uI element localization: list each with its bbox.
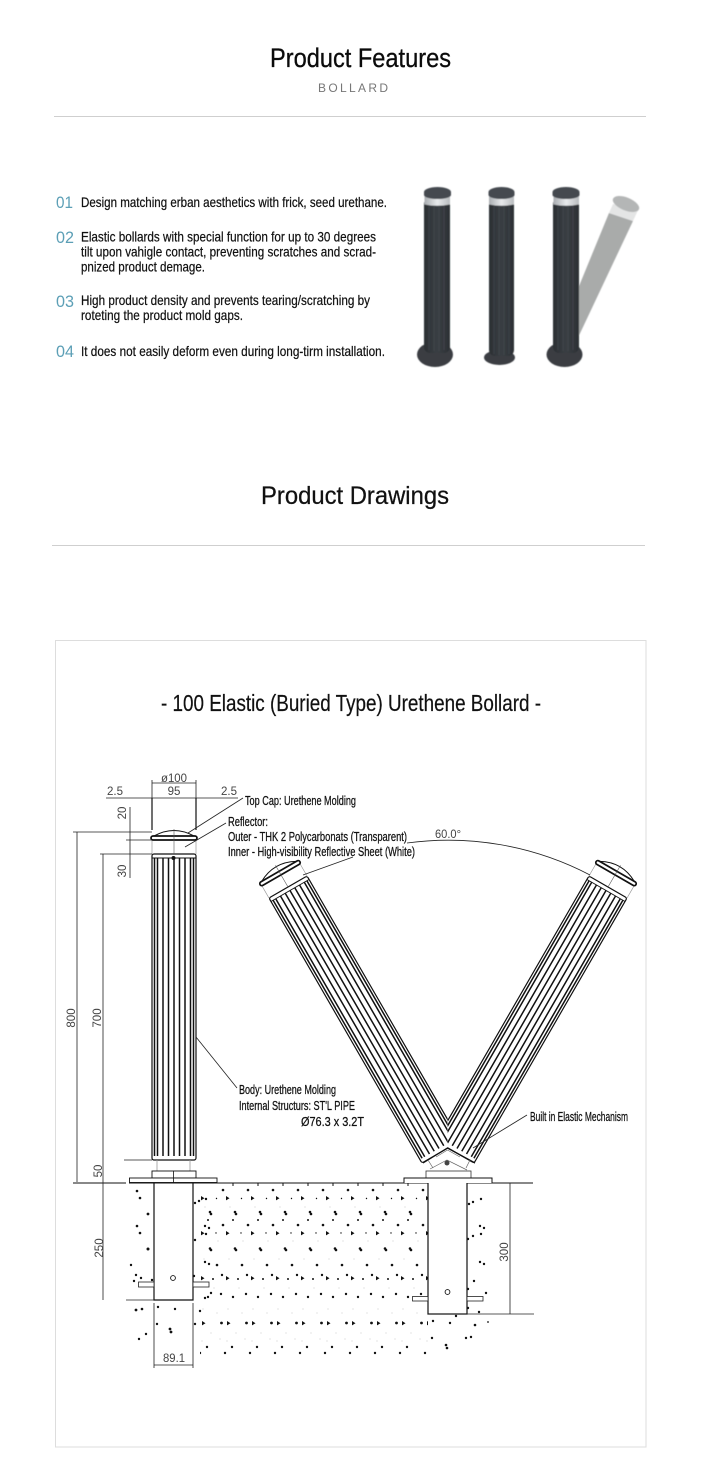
dimension values: 2.5 [107,786,123,798]
dimension lines [66,773,534,1365]
title: Product Features: Product Features [270,43,451,73]
dimension values: 2.5 [221,786,237,798]
feature 01: Design matching erban aesthetics with frick, seed urethane. [81,194,387,210]
bollard 3 with tilted ghost [546,187,641,367]
feature 03: High product density and prevents tearing/scratching by [81,292,370,308]
feature 01: 01 [56,194,73,212]
dimension values: 30 [117,865,129,877]
feature 02: pnized product demage. [81,258,205,274]
feature 03 [56,292,370,323]
heading: Product Drawings: Product Drawings [261,482,449,510]
callout: body [196,1037,364,1129]
callout: top cap [188,794,356,833]
callout: body: Body: Urethene Molding [239,1083,336,1097]
left bollard elevation [130,829,217,1183]
dimension values: 250 [94,1238,106,1258]
feature 04: It does not easily deform even during long-tirm installation. [81,343,385,359]
dimension values: 20 [117,807,129,819]
feature 02: Elastic bollards with special function for up to 30 degrees [81,228,376,244]
dimension values: 50 [93,1165,105,1177]
feature 02 [56,228,376,274]
subtitle: bollard: BOLLARD [318,81,388,95]
dimension values [66,773,511,1365]
callout: elastic mechanism: Built in Elastic Mechanism [530,1110,628,1124]
feature 02: tilt upon vahigle contact, preventing scratches and scrad- [81,244,376,260]
product photo: bollards [417,187,641,367]
feature 03: 03 [56,293,74,311]
callout: reflector: Outer - THK 2 Polycarbonats (Transparent) [228,830,407,844]
dimension values: 700 [92,1008,104,1028]
callout: body: Ø76.3 x 3.2T [301,1115,364,1129]
dimension values: 800 [66,1008,78,1028]
callout: body: Internal Structurs: ST'L PIPE [239,1099,355,1113]
right buried sleeve [412,1183,483,1314]
dimension values: ø100 [161,773,187,785]
feature 03: roteting the product mold gaps. [81,307,243,323]
ground line [73,1182,533,1184]
60 degree arc [303,840,590,875]
bollard 2 [484,187,515,365]
bollard 1 [417,187,453,367]
right tilted bollard [435,854,640,1164]
tilted bollards V [256,854,640,1314]
elastic mechanism and base [404,1148,492,1183]
left buried sleeve [138,1183,209,1368]
drawing title: - 100 Elastic (Buried Type) Urethene Bollard - [161,690,541,716]
callout: elastic mechanism [473,1110,628,1148]
feature 04: 04 [56,343,74,361]
gravel ground fill [130,1183,489,1358]
dimension values: 89.1 [163,1353,185,1365]
dimension values: 60.0° [435,829,461,841]
callout: top cap: Top Cap: Urethene Molding [245,794,356,808]
left tilted bollard [256,854,461,1164]
dimension values: 95 [168,786,180,798]
callout: reflector: Reflector: [228,815,268,829]
feature 02: 02 [56,229,74,247]
dimension values: 300 [499,1242,511,1262]
feature list [56,194,387,361]
panel: technical drawing [56,640,646,1447]
callout: reflector [185,815,415,859]
callout: reflector: Inner - High-visibility Reflective Sheet (White) [228,845,415,859]
